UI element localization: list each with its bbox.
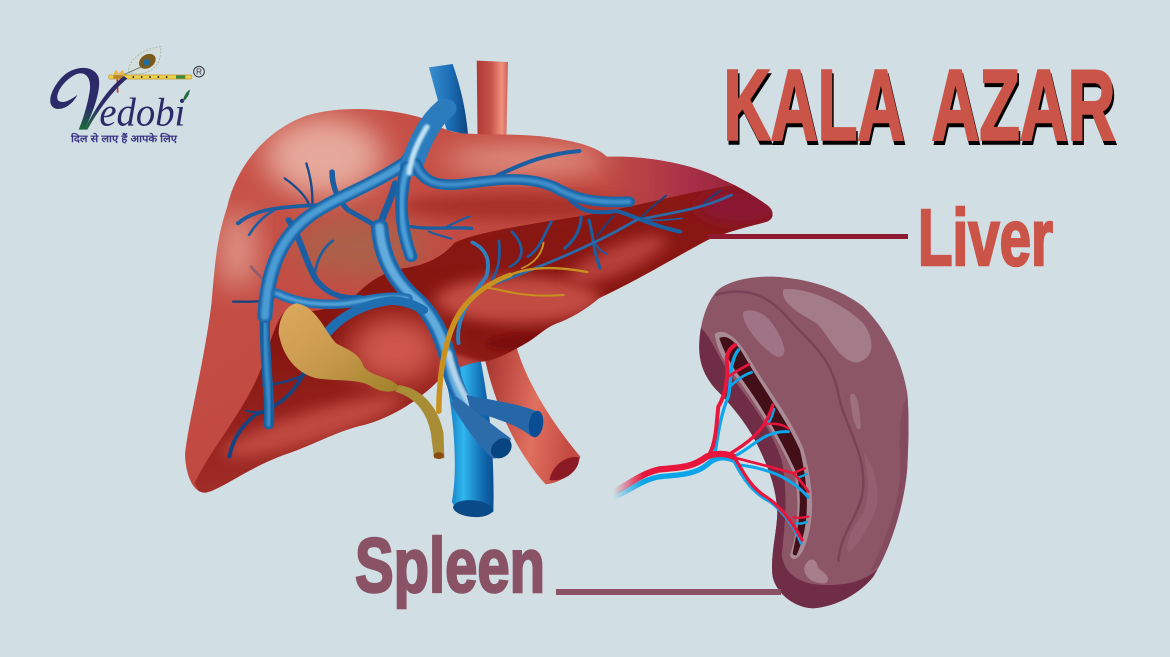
liver underside	[194, 185, 773, 493]
spleen blue vessels	[613, 350, 808, 543]
blue vessels: fine dark branches	[229, 151, 731, 457]
spleen dark rim	[699, 328, 878, 608]
bile ducts	[439, 243, 587, 412]
label: Spleen: Spleen	[355, 523, 545, 609]
vessel: vena cava top	[429, 64, 468, 135]
liver tip shading	[606, 156, 772, 234]
vessel: inferior vena cava lower	[447, 358, 494, 519]
logo icon: flute	[109, 69, 192, 93]
gallbladder	[279, 303, 444, 459]
liver body	[185, 109, 773, 493]
vessel: portal branch ends	[451, 395, 545, 462]
spleen body	[693, 270, 913, 617]
leader line: spleen	[556, 589, 781, 595]
title shadow: KALA	[725, 54, 906, 166]
logo: Vedobi	[50, 47, 204, 145]
vessel: aorta lower	[484, 345, 580, 484]
liver illustration	[170, 61, 802, 519]
blue vessels: main trunk and arcs	[265, 108, 629, 450]
vessel: aorta top	[477, 61, 508, 137]
logo mark: registered symbol: R	[196, 67, 202, 77]
logo wordmark: edobi	[99, 89, 185, 134]
spleen highlights	[783, 289, 871, 362]
label: Liver: Liver	[918, 193, 1053, 282]
logo tagline: दिल से लाए हैं आपके लिए	[70, 132, 178, 145]
spleen right shade	[870, 396, 908, 571]
spleen crease lines	[715, 292, 863, 562]
logo mark: V swash	[50, 68, 127, 130]
spleen red vessels	[613, 345, 808, 540]
title text: KALA	[724, 50, 904, 162]
leader line: liver	[708, 234, 908, 239]
spleen illustration	[613, 270, 913, 617]
logo leaf accent	[183, 89, 190, 102]
spleen hilum	[715, 332, 812, 559]
logo icon: peacock feather	[123, 47, 161, 75]
title: KALA AZAR	[724, 50, 1117, 166]
logo mark: registered symbol	[194, 66, 204, 77]
